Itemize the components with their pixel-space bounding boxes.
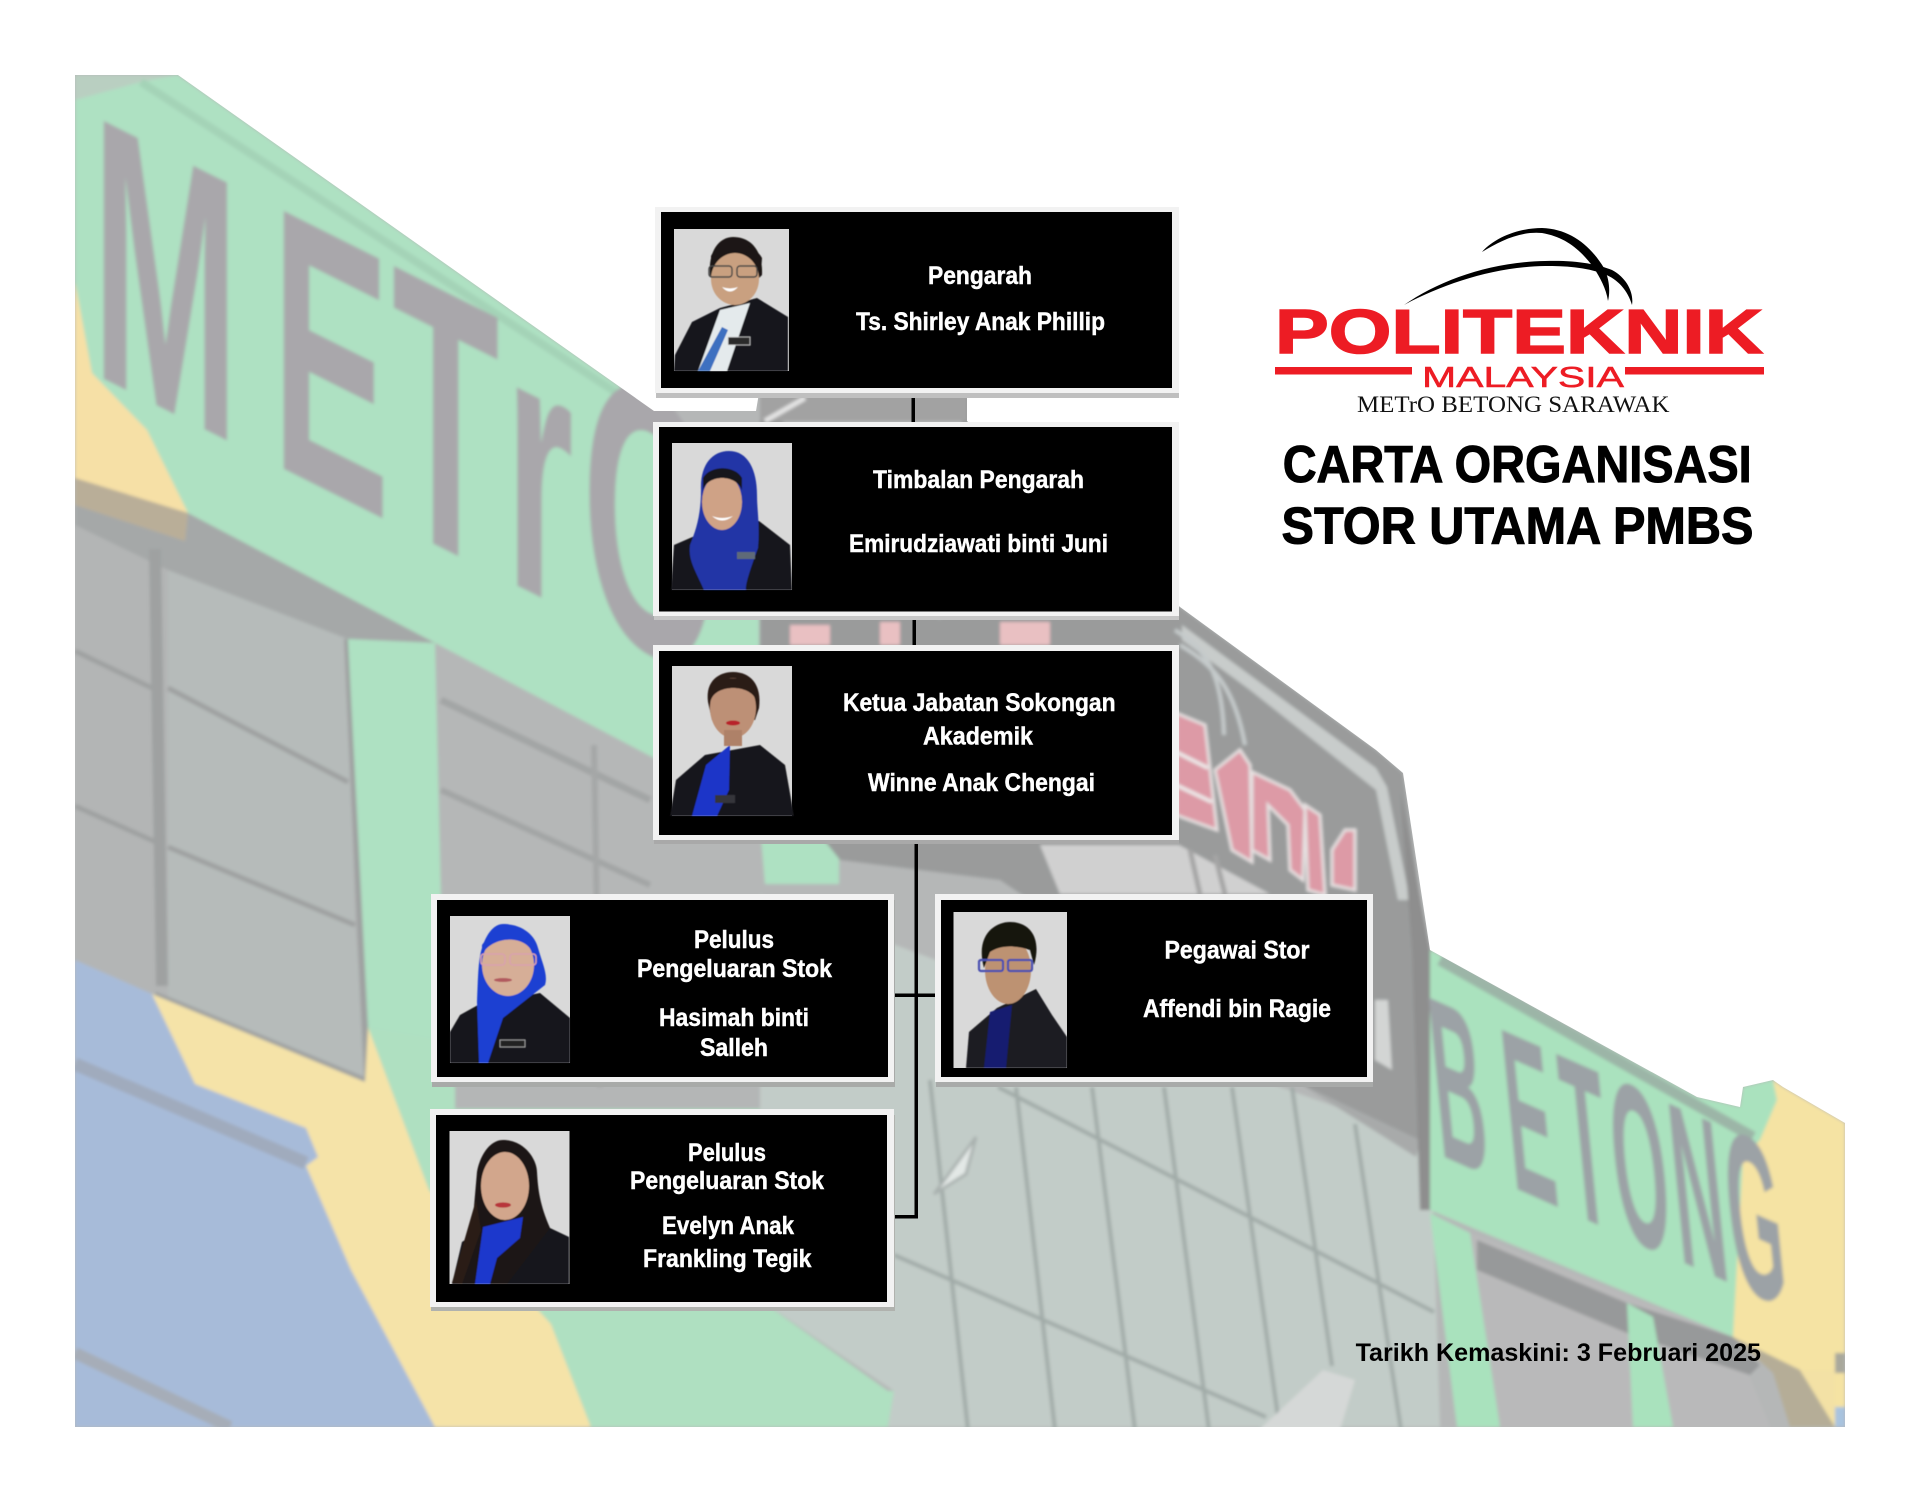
text: Pengarah: Pengarah [928,262,1032,290]
photo: Hasimah [450,916,570,1063]
text: Affendi bin Ragie: Affendi bin Ragie [1143,995,1331,1023]
connector: Timbalan Pengarah to Ketua Jabatan [912,618,916,648]
logo: right rule [1625,367,1764,374]
card: Pelulus Pengeluaran Stok, Hasimah [431,894,895,1087]
logo: MALAYSIA: MALAYSIA [1422,362,1625,394]
logo: METrO BETONG SARAWAK: METrO BETONG SARAWAK [1357,392,1670,417]
card: Timbalan Pengarah [653,422,1179,620]
green pillars [346,637,840,1040]
photo: Evelyn [450,1131,570,1284]
text: Evelyn Anak: Evelyn Anak [662,1212,794,1240]
text: Timbalan Pengarah: Timbalan Pengarah [873,466,1084,494]
logo: left rule [1275,367,1412,374]
text: Pegawai Stor: Pegawai Stor [1164,936,1310,964]
connector: Pengarah to Timbalan Pengarah [912,393,915,423]
left windows [75,505,650,1100]
photo: Pengarah [674,229,789,371]
yellow facade [152,994,591,1427]
text: Ketua Jabatan Sokongan: Ketua Jabatan Sokongan [843,689,1116,717]
title line 2: STOR UTAMA PMBS [1282,498,1754,556]
text: Pelulus: Pelulus [688,1139,766,1167]
right green fascia [1430,950,1777,1427]
card: Pelulus Pengeluaran Stok, Evelyn [430,1109,895,1311]
green fascia with METrO lettering: METrO [92,35,719,767]
text: Winne Anak Chengai: Winne Anak Chengai [868,769,1095,797]
BETONG lettering: BETONG [1419,946,1796,1359]
lower green facade [368,1027,894,1427]
sign block [760,393,1432,1210]
text: Pengeluaran Stok: Pengeluaran Stok [637,955,832,983]
card: Ketua Jabatan Sokongan Akademik [653,645,1179,844]
text: Ts. Shirley Anak Phillip: Ts. Shirley Anak Phillip [856,308,1105,336]
card: Pengarah [655,207,1179,398]
text: Hasimah binti: Hasimah binti [659,1004,809,1032]
card: Pegawai Stor [935,894,1373,1087]
logo: black swoosh [1404,228,1632,305]
logo: Politeknik Malaysia METrO Betong Sarawak [1275,228,1764,417]
logo: POLITEKNIK wordmark: POLITEKNIK [1275,298,1763,367]
icon: leaf ornament [934,1137,976,1194]
connector: horizontal to second Pelulus [893,1215,918,1218]
text: Salleh: Salleh [700,1034,768,1062]
text: Pengeluaran Stok: Pengeluaran Stok [630,1167,824,1195]
photo: Timbalan Pengarah [671,443,792,590]
right yellow facade [1733,1080,1845,1427]
update date: Tarikh Kemaskini: 3 Februari 2025 [1356,1339,1761,1367]
curtain wall [455,895,1440,1430]
connector: horizontal to Pelulus and Pegawai Stor [893,994,937,997]
text: Frankling Tegik: Frankling Tegik [643,1245,812,1273]
text: Akademik: Akademik [923,722,1033,750]
connector: main vertical trunk [914,840,918,1218]
blue facade [75,960,435,1427]
title line 1: CARTA ORGANISASI [1283,436,1752,494]
photo: Ketua Jabatan [670,666,794,816]
text: Emirudziawati binti Juni: Emirudziawati binti Juni [849,530,1108,558]
text: Pelulus: Pelulus [694,926,774,954]
lower swoosh ornament [1259,1370,1355,1430]
photo: Affendi [954,912,1067,1068]
